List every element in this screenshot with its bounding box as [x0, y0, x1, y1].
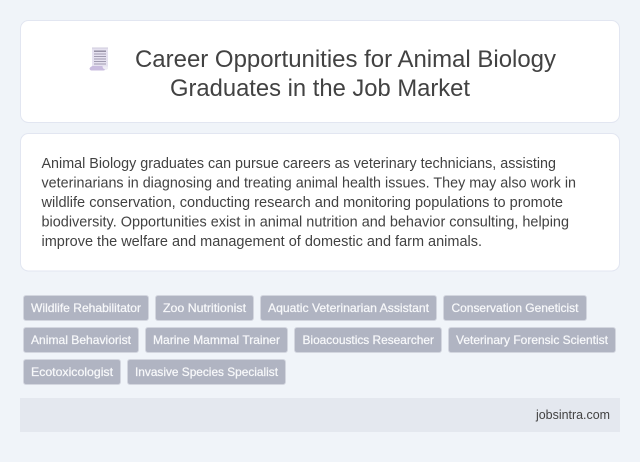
panel: description	[20, 134, 620, 271]
tag: Veterinary Forensic Scientist	[448, 328, 616, 352]
title	[135, 46, 556, 102]
tag: Invasive Species Specialist: Invasive Species Specialist	[135, 365, 279, 379]
text block: description	[40, 156, 576, 250]
tag: Bioacoustics Researcher: Bioacoustics Researcher	[302, 333, 434, 347]
tag: Conservation Geneticist: Conservation Geneticist	[452, 301, 579, 315]
tag: Marine Mammal Trainer: Marine Mammal Trainer	[153, 333, 280, 347]
tag: Invasive Species Specialist	[128, 360, 286, 384]
panel: header	[20, 20, 620, 122]
text block: description: veterinarians in diagnosing and treating animal health issues. They may also work in	[42, 176, 576, 192]
icon: document scroll	[90, 48, 108, 70]
text block: description: wildlife conservation, conducting research and monitoring populations to promote	[40, 195, 563, 211]
tag: Zoo Nutritionist	[156, 296, 254, 320]
tags: career list	[24, 296, 616, 384]
tag: Ecotoxicologist	[24, 360, 120, 384]
title: Career Opportunities for Animal Biology	[135, 46, 556, 73]
tag: Animal Behaviorist: Animal Behaviorist	[31, 333, 132, 347]
text block: description: improve the welfare and management of domestic and farm animals.	[42, 234, 482, 250]
footer	[20, 398, 620, 432]
tag: Wildlife Rehabilitator	[24, 296, 148, 320]
tag: Zoo Nutritionist: Zoo Nutritionist	[163, 301, 247, 315]
tag: Ecotoxicologist: Ecotoxicologist	[31, 365, 114, 379]
tag: Veterinary Forensic Scientist: Veterinary Forensic Scientist	[456, 333, 609, 347]
footer source text: jobsintra.com	[535, 408, 610, 422]
tag: Animal Behaviorist	[24, 328, 138, 352]
tag: Conservation Geneticist	[444, 296, 586, 320]
tag: Aquatic Veterinarian Assistant: Aquatic Veterinarian Assistant	[268, 301, 430, 315]
tag: Bioacoustics Researcher	[294, 328, 442, 352]
text block: description: Animal Biology graduates can pursue careers as veterinary technicians, assisting	[42, 156, 556, 172]
tag: Wildlife Rehabilitator: Wildlife Rehabilitator	[31, 301, 141, 315]
title: Graduates in the Job Market	[170, 75, 470, 102]
tag: Aquatic Veterinarian Assistant	[260, 296, 436, 320]
tag: Marine Mammal Trainer	[146, 328, 288, 352]
text block: description: biodiversity. Opportunities exist in animal nutrition and behavior consulting, helping	[42, 214, 569, 230]
